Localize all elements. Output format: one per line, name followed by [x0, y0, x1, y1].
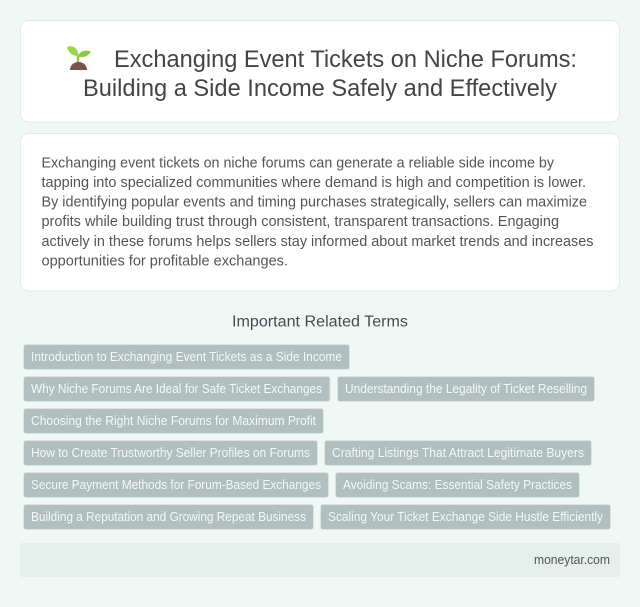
tag: Building a Reputation and Growing Repeat Business [31, 510, 306, 524]
summary text: Exchanging event tickets on niche forums can generate a reliable side income by [42, 156, 555, 172]
icon: sprout [67, 46, 91, 70]
title: Exchanging Event Tickets on Niche Forums: [114, 46, 577, 73]
tag [338, 376, 594, 402]
tag [320, 504, 610, 530]
panel: summary card [20, 134, 620, 291]
summary text: tapping into specialized communities where demand is high and competition is lower. [42, 175, 586, 191]
tag: Introduction to Exchanging Event Tickets as a Side Income [31, 350, 342, 364]
tag [24, 376, 330, 402]
tag [24, 472, 328, 498]
tag [24, 440, 318, 466]
tag list [24, 344, 610, 530]
tag: Understanding the Legality of Ticket Reselling [345, 382, 587, 396]
tag: Choosing the Right Niche Forums for Maximum Profit [31, 414, 316, 428]
tag: Avoiding Scams: Essential Safety Practices [343, 478, 572, 492]
tag [24, 344, 350, 370]
footer bar [20, 543, 620, 577]
tag: Secure Payment Methods for Forum-Based Exchanges [31, 478, 321, 492]
tag: Scaling Your Ticket Exchange Side Hustle Efficiently [328, 510, 604, 524]
title [83, 46, 577, 102]
tag: Why Niche Forums Are Ideal for Safe Ticket Exchanges [31, 382, 322, 396]
summary text [42, 156, 594, 270]
tag [336, 472, 580, 498]
footer source: moneytar.com [534, 552, 610, 567]
summary text: opportunities for profitable exchanges. [42, 254, 288, 270]
tag: Crafting Listings That Attract Legitimate Buyers [332, 446, 584, 460]
summary text: actively in these forums helps sellers stay informed about market trends and increases [42, 234, 594, 250]
summary text: profits while building trust through consistent, transparent transactions. Engaging [42, 214, 559, 230]
panel: title card [20, 20, 620, 122]
summary text: By identifying popular events and timing purchases strategically, sellers can maximize [42, 194, 587, 210]
tag [24, 504, 314, 530]
tag: How to Create Trustworthy Seller Profiles on Forums [31, 446, 310, 460]
tag [24, 408, 324, 434]
tag [324, 440, 592, 466]
title: Building a Side Income Safely and Effectively [83, 75, 557, 102]
heading: related terms: Important Related Terms [232, 314, 408, 330]
